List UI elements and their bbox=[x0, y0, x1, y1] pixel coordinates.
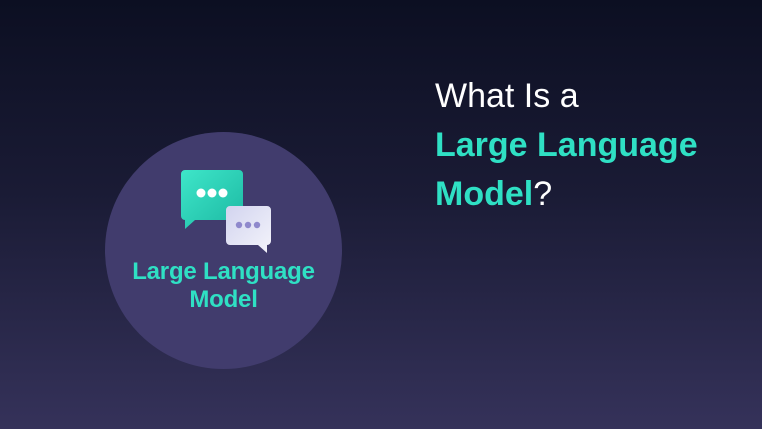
title: What Is a bbox=[435, 77, 579, 115]
icon: chat bubbles bbox=[181, 170, 271, 253]
panel: circle bbox=[105, 132, 342, 369]
title bbox=[435, 77, 698, 213]
title: Model? bbox=[435, 175, 552, 213]
title: Large Language bbox=[435, 126, 698, 164]
label bbox=[132, 258, 315, 313]
label: Large Language bbox=[132, 258, 315, 285]
label: Model bbox=[189, 286, 258, 313]
